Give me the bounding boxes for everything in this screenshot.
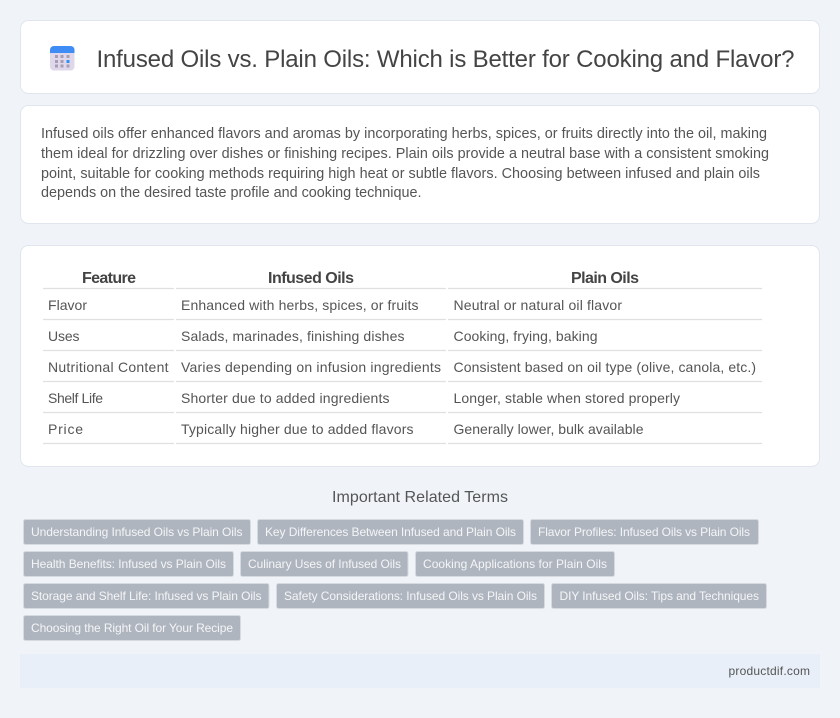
row: price <box>48 421 644 437</box>
row: nutritional content: Nutritional Content <box>48 359 169 375</box>
tag <box>530 520 758 544</box>
tag: Choosing the Right Oil for Your Recipe <box>31 621 233 635</box>
row: flavor: Neutral or natural oil flavor <box>454 297 622 313</box>
tag <box>24 584 269 608</box>
tag: Flavor Profiles: Infused Oils vs Plain Oils <box>538 525 750 539</box>
intro paragraph: point, suitable for cooking methods requiring high heat or subtle flavors. Choosing between infused and plain oils <box>41 166 760 182</box>
row: price: Generally lower, bulk available <box>454 421 644 437</box>
tag <box>258 520 524 544</box>
row: flavor: Enhanced with herbs, spices, or fruits <box>181 297 418 313</box>
footer bar <box>20 654 820 688</box>
related terms tags <box>24 520 766 640</box>
intro paragraph: Infused oils offer enhanced flavors and aromas by incorporating herbs, spices, or fruits directly into the oil, making <box>41 126 767 142</box>
tag: Safety Considerations: Infused Oils vs Plain Oils <box>284 589 537 603</box>
table header: Feature <box>82 270 136 287</box>
tag: Culinary Uses of Infused Oils <box>248 557 401 571</box>
tag <box>276 584 544 608</box>
tag: Key Differences Between Infused and Plain Oils <box>265 525 516 539</box>
title: Infused Oils vs. Plain Oils: Which is Better for Cooking and Flavor? <box>96 46 794 73</box>
footer text: productdif.com <box>728 664 810 678</box>
row: shelf life: Shelf Life <box>48 390 103 406</box>
row: price: Typically higher due to added flavors <box>181 421 414 437</box>
tag <box>24 520 250 544</box>
tag <box>24 616 240 640</box>
header card <box>20 20 820 94</box>
row: shelf life: Shorter due to added ingredients <box>181 390 390 406</box>
table header: Infused Oils <box>268 270 354 287</box>
row: nutritional content: Varies depending on infusion ingredients <box>181 359 441 375</box>
row: nutritional content: Consistent based on oil type (olive, canola, etc.) <box>454 359 756 375</box>
comparison table panel <box>20 246 820 466</box>
intro paragraph: depends on the desired taste profile and cooking technique. <box>41 185 422 201</box>
tag: Understanding Infused Oils vs Plain Oils <box>31 525 242 539</box>
row: price: Price <box>48 421 83 437</box>
row: uses: Uses <box>48 328 80 344</box>
row: shelf life: Longer, stable when stored properly <box>454 390 680 406</box>
icon: calendar <box>50 46 74 70</box>
row: uses <box>48 328 598 344</box>
table header: Plain Oils <box>571 270 639 287</box>
row: uses: Salads, marinades, finishing dishes <box>181 328 404 344</box>
tag <box>24 552 234 576</box>
row: flavor: Flavor <box>48 297 87 313</box>
tag <box>552 584 766 608</box>
tag: Cooking Applications for Plain Oils <box>423 557 607 571</box>
table header <box>82 270 639 287</box>
row: uses: Cooking, frying, baking <box>454 328 598 344</box>
tag: Storage and Shelf Life: Infused vs Plain Oils <box>31 589 262 603</box>
row: nutritional content <box>48 359 756 375</box>
row: shelf life <box>48 390 680 406</box>
related terms heading: Important Related Terms <box>332 489 508 506</box>
tag <box>416 552 614 576</box>
tag: Health Benefits: Infused vs Plain Oils <box>31 557 226 571</box>
tag <box>240 552 408 576</box>
intro paragraph <box>41 126 769 201</box>
row: flavor <box>48 297 622 313</box>
intro paragraph: them ideal for drizzling over dishes or finishing recipes. Plain oils provide a neutral base with a consistent smoking <box>41 146 769 162</box>
intro text panel <box>20 106 820 224</box>
tag: DIY Infused Oils: Tips and Techniques <box>560 589 759 603</box>
